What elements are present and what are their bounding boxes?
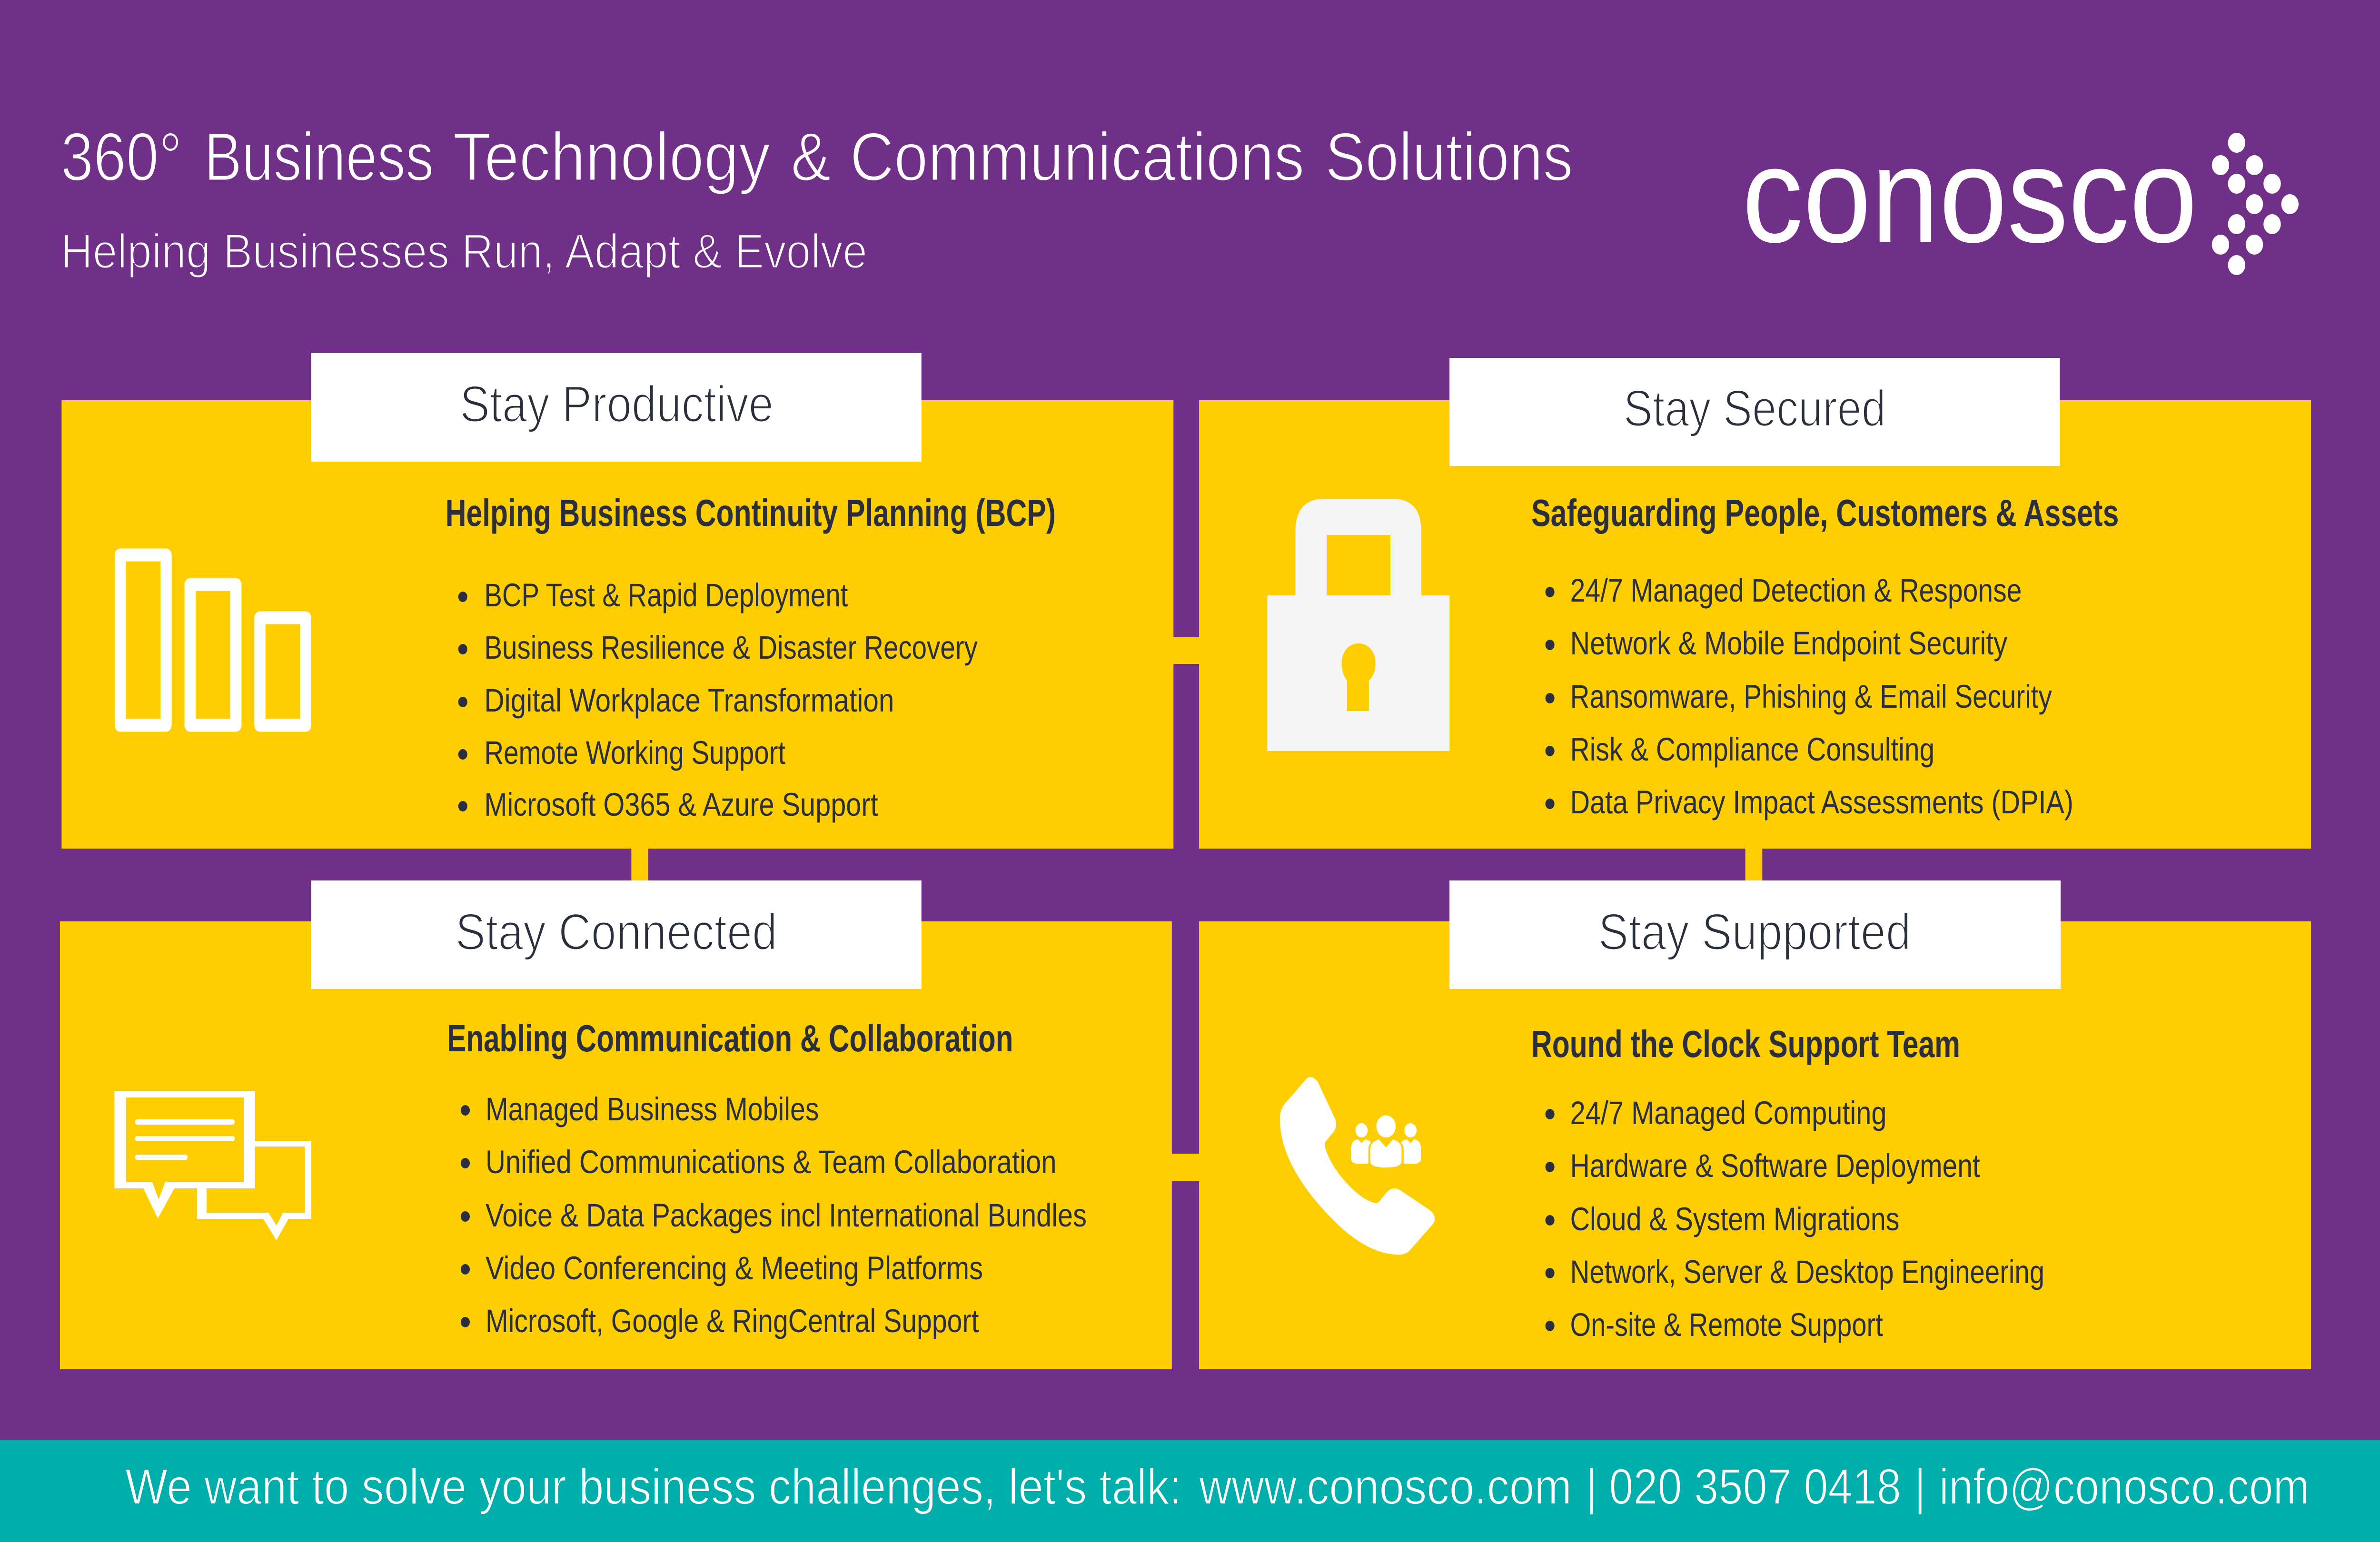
heading: Safeguarding People, Customers & Assets bbox=[1531, 491, 2119, 534]
panel background bbox=[60, 921, 1172, 1369]
icon: phone with team bbox=[1280, 1077, 1435, 1255]
bullet list: Microsoft O365 & Azure Support bbox=[484, 786, 878, 823]
footer contact text: | bbox=[1914, 1459, 1926, 1515]
bullet list: Voice & Data Packages incl International Bundles bbox=[486, 1197, 1087, 1234]
panel background bbox=[1199, 400, 2311, 849]
bullet list bbox=[458, 577, 978, 823]
connector: right vertical bbox=[1745, 846, 1762, 884]
footer contact text: info@conosco.com bbox=[1939, 1459, 2310, 1515]
tab label: Stay Supported bbox=[1598, 903, 1911, 960]
icon: bar chart bbox=[120, 555, 306, 725]
tab: stay connected bbox=[311, 880, 922, 989]
icon: padlock bbox=[1267, 499, 1449, 751]
bullet list: Risk & Compliance Consulting bbox=[1570, 731, 1934, 768]
bullet list: Data Privacy Impact Assessments (DPIA) bbox=[1570, 784, 2073, 820]
bullet list bbox=[1546, 572, 2073, 820]
bullet list: Business Resilience & Disaster Recovery bbox=[484, 629, 978, 666]
bullet list: Hardware & Software Deployment bbox=[1570, 1147, 1980, 1184]
tab: stay secured bbox=[1449, 358, 2060, 466]
footer contact text bbox=[125, 1459, 2310, 1515]
tab: stay productive bbox=[311, 353, 922, 462]
tab label: Stay Connected bbox=[456, 903, 777, 960]
panel background bbox=[61, 400, 1173, 849]
bullet list bbox=[461, 1091, 1087, 1339]
subtitle: Helping Businesses Run, Adapt & Evolve bbox=[61, 225, 867, 278]
footer band bbox=[0, 1440, 2380, 1542]
bullet list: Ransomware, Phishing & Email Security bbox=[1570, 678, 2052, 715]
bullet list: 24/7 Managed Computing bbox=[1570, 1095, 1887, 1131]
bullet list: Network, Server & Desktop Engineering bbox=[1570, 1254, 2044, 1290]
bullet list: Cloud & System Migrations bbox=[1570, 1201, 1899, 1237]
bullet list: Video Conferencing & Meeting Platforms bbox=[486, 1250, 983, 1286]
bullet list: Network & Mobile Endpoint Security bbox=[1570, 625, 2008, 662]
bullet list: Digital Workplace Transformation bbox=[484, 682, 894, 719]
connector: bottom horizontal bbox=[1170, 1154, 1201, 1181]
tab label: Stay Productive bbox=[460, 376, 774, 433]
title: Communications bbox=[850, 119, 1304, 195]
logo: conosco: conosco bbox=[1742, 119, 2197, 271]
connector: top horizontal bbox=[1171, 637, 1201, 664]
title: Business bbox=[204, 119, 434, 195]
panel: stay productive bbox=[61, 353, 1173, 849]
footer contact text: We want to solve your business challenges, let's talk: bbox=[125, 1459, 1182, 1515]
tab: stay supported bbox=[1449, 880, 2061, 989]
panel: stay secured bbox=[1199, 358, 2311, 849]
title: 360° bbox=[61, 119, 182, 195]
title: Solutions bbox=[1325, 119, 1573, 195]
bullet list: 24/7 Managed Detection & Response bbox=[1570, 572, 2022, 609]
panel: stay connected bbox=[60, 880, 1172, 1369]
title bbox=[61, 119, 1573, 195]
footer contact text: 020 3507 0418 bbox=[1609, 1459, 1901, 1515]
title: & bbox=[791, 119, 831, 195]
bullet list: Unified Communications & Team Collaboration bbox=[486, 1144, 1057, 1180]
panel background bbox=[1199, 921, 2311, 1369]
footer contact text: | bbox=[1586, 1459, 1597, 1515]
title: Technology bbox=[453, 119, 771, 195]
icon: chat bubbles bbox=[114, 1091, 311, 1240]
heading: Round the Clock Support Team bbox=[1531, 1022, 1960, 1065]
footer contact text: www.conosco.com bbox=[1199, 1459, 1572, 1515]
bullet list: Remote Working Support bbox=[484, 734, 785, 771]
bullet list bbox=[1546, 1095, 2044, 1343]
bullet list: On-site & Remote Support bbox=[1570, 1306, 1883, 1343]
panel: stay supported bbox=[1199, 880, 2311, 1369]
bullet list: Managed Business Mobiles bbox=[486, 1091, 819, 1127]
bullet list: Microsoft, Google & RingCentral Support bbox=[486, 1303, 979, 1339]
tab label: Stay Secured bbox=[1624, 380, 1886, 437]
connector: left vertical bbox=[631, 846, 648, 884]
bullet list: BCP Test & Rapid Deployment bbox=[484, 577, 848, 613]
heading: Helping Business Continuity Planning (BCP) bbox=[446, 491, 1056, 534]
heading: Enabling Communication & Collaboration bbox=[447, 1017, 1013, 1059]
